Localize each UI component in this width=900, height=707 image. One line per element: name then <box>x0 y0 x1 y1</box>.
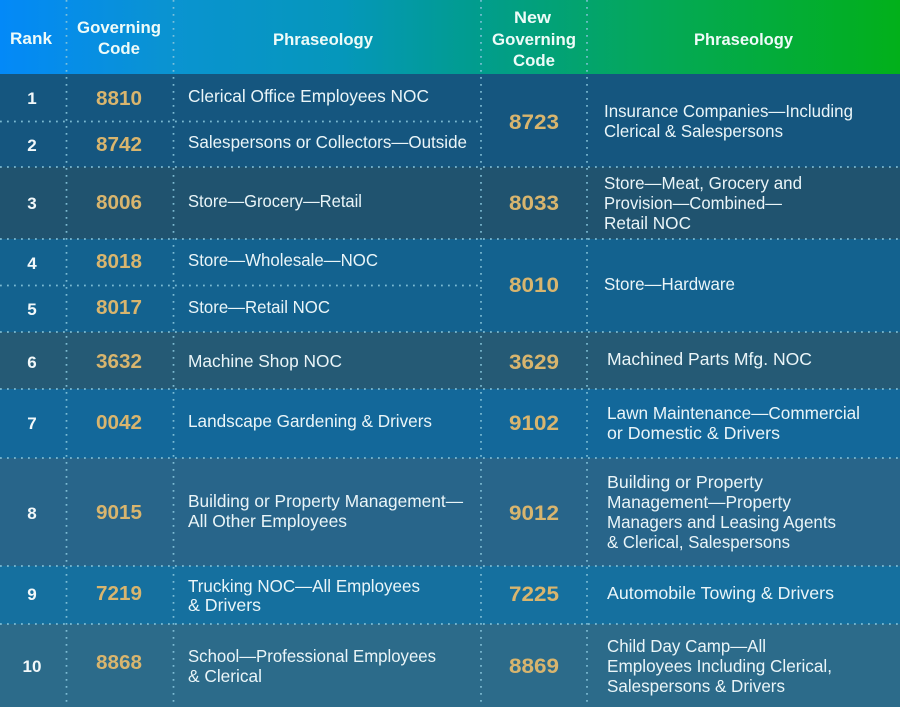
code 7219: 7219 <box>96 583 142 605</box>
new phrase 8869: Salespersons & Drivers <box>607 676 785 696</box>
phrase rank 9: & Drivers <box>188 595 261 615</box>
new phrase 3629: Machined Parts Mfg. NOC <box>607 349 812 369</box>
rank 10: 10 <box>23 657 41 676</box>
phrase rank 8 <box>188 491 463 531</box>
new phrase 9102: Lawn Maintenance—Commercial <box>607 403 860 423</box>
new phrase 8010: Store—Hardware <box>604 274 735 294</box>
new phrase 8723 <box>604 101 853 141</box>
phrase rank 10: & Clerical <box>188 666 262 686</box>
rank 7: 7 <box>27 414 37 433</box>
phrase rank 4: Store—Wholesale—NOC <box>188 250 378 270</box>
new phrase 8033 <box>604 173 802 233</box>
code 9015: 9015 <box>96 502 142 524</box>
code 8810: 8810 <box>96 88 142 110</box>
band: rank 8 <box>0 458 900 566</box>
new code 8033: 8033 <box>509 191 559 215</box>
phrase rank 8: Building or Property Management— <box>188 491 463 511</box>
phrase rank 5: Store—Retail NOC <box>188 297 330 317</box>
header: New Governing Code: New <box>514 9 551 27</box>
header: Rank: Rank <box>10 30 53 48</box>
phrase rank 8: All Other Employees <box>188 511 347 531</box>
band: rank 10 <box>0 624 900 707</box>
band: rank 3 <box>0 167 900 239</box>
band: rank 6 <box>0 332 900 389</box>
phrase rank 7: Landscape Gardening & Drivers <box>188 411 432 431</box>
header: Phraseology: Phraseology <box>273 31 374 49</box>
rank 3: 3 <box>27 194 37 213</box>
rank 6: 6 <box>27 353 37 372</box>
code 8868: 8868 <box>96 652 142 674</box>
new phrase 9012: Managers and Leasing Agents <box>607 512 836 532</box>
new code 9102: 9102 <box>509 411 559 435</box>
header background <box>0 0 900 74</box>
new phrase 8033: Retail NOC <box>604 213 691 233</box>
new phrase 8723: Clerical & Salespersons <box>604 121 783 141</box>
rank 8: 8 <box>27 504 37 523</box>
rank 2: 2 <box>27 136 37 155</box>
code 8018: 8018 <box>96 251 142 273</box>
new phrase 8723: Insurance Companies—Including <box>604 101 853 121</box>
new phrase 8033: Store—Meat, Grocery and <box>604 173 802 193</box>
phrase rank 9 <box>188 576 420 615</box>
header: Governing Code: Governing <box>77 19 161 37</box>
new phrase 8033: Provision—Combined— <box>604 193 782 213</box>
new code 8869: 8869 <box>509 654 559 678</box>
phrase rank 10 <box>188 646 436 686</box>
new phrase 8869: Employees Including Clerical, <box>607 656 832 676</box>
new phrase 9102 <box>607 403 860 443</box>
code 8742: 8742 <box>96 134 142 156</box>
phrase rank 6: Machine Shop NOC <box>188 351 342 371</box>
new phrase 9012: & Clerical, Salespersons <box>607 532 790 552</box>
header: New Governing Code <box>492 9 576 70</box>
phrase rank 2: Salespersons or Collectors—Outside <box>188 132 467 152</box>
new phrase 8869: Child Day Camp—All <box>607 636 766 656</box>
rank 9: 9 <box>27 585 37 604</box>
header: New Governing Code: Governing <box>492 31 576 49</box>
header: Governing Code <box>77 19 161 58</box>
new phrase 7225: Automobile Towing & Drivers <box>607 583 834 603</box>
rank 4: 4 <box>27 254 37 273</box>
new code 8010: 8010 <box>509 273 559 297</box>
rank 1: 1 <box>27 89 37 108</box>
new code 8723: 8723 <box>509 110 559 134</box>
code 8006: 8006 <box>96 192 142 214</box>
new phrase 9012 <box>607 472 836 552</box>
header row <box>0 0 900 74</box>
phrase rank 1: Clerical Office Employees NOC <box>188 86 429 106</box>
code 0042: 0042 <box>96 412 142 434</box>
band: ranks 1 and 2 <box>0 74 900 167</box>
new code 9012: 9012 <box>509 501 559 525</box>
new phrase 9012: Management—Property <box>607 492 791 512</box>
new phrase 9012: Building or Property <box>607 472 763 492</box>
new phrase 8869 <box>607 636 832 696</box>
code 3632: 3632 <box>96 351 142 373</box>
new phrase 9102: or Domestic & Drivers <box>607 423 780 443</box>
rank 5: 5 <box>27 300 37 319</box>
phrase rank 10: School—Professional Employees <box>188 646 436 666</box>
band: ranks 4 and 5 <box>0 239 900 332</box>
phrase rank 9: Trucking NOC—All Employees <box>188 576 420 596</box>
header: new Phraseology: Phraseology <box>694 31 794 49</box>
band: rank 7 <box>0 389 900 458</box>
code 8017: 8017 <box>96 297 142 319</box>
phrase rank 3: Store—Grocery—Retail <box>188 191 362 211</box>
new code 3629: 3629 <box>509 350 559 374</box>
new code 7225: 7225 <box>509 582 559 606</box>
band: rank 9 <box>0 566 900 624</box>
header: New Governing Code: Code <box>513 52 555 70</box>
header: Governing Code: Code <box>98 40 140 58</box>
